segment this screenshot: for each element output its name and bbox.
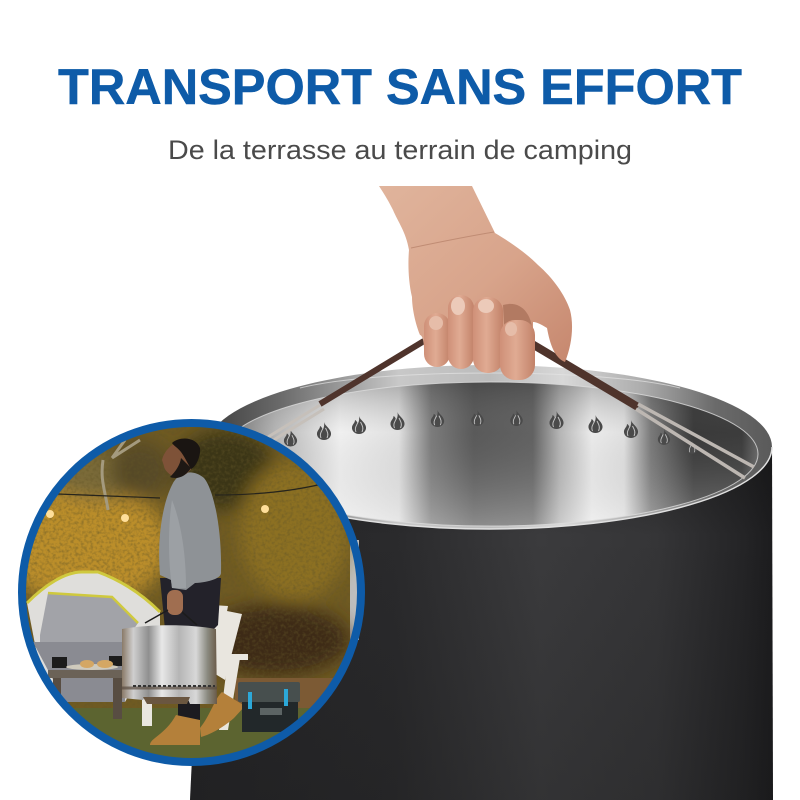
wrist and palm	[379, 186, 572, 362]
fire pit black body	[190, 447, 773, 800]
little finger	[500, 320, 535, 380]
subtitle: De la terrasse au terrain de camping	[168, 135, 632, 165]
product: fire pit	[190, 365, 773, 800]
flame vent row	[284, 410, 697, 454]
leaf litter band	[235, 678, 333, 708]
cooler	[238, 682, 300, 732]
inset photo	[0, 420, 361, 770]
fire pit steel interior	[222, 382, 758, 526]
ground	[74, 708, 310, 758]
mini fire pit	[122, 625, 217, 704]
bare tree	[102, 440, 140, 510]
picnic table	[48, 656, 122, 719]
middle finger	[448, 295, 474, 369]
adirondack chair	[142, 605, 248, 730]
head and beard	[162, 444, 192, 476]
title: TRANSPORT SANS EFFORT	[58, 59, 742, 115]
trousers and rear leg	[160, 578, 221, 629]
inset scene	[26, 427, 356, 758]
fire pit steel rim	[207, 365, 772, 529]
string lights	[46, 484, 318, 522]
inset blue ring	[22, 423, 361, 762]
shadow between palm and thumb	[503, 304, 533, 345]
ring finger	[473, 297, 503, 373]
foliage background	[26, 427, 356, 708]
boots	[200, 692, 245, 737]
hand	[167, 590, 183, 615]
hand	[379, 186, 572, 380]
wrist crease	[411, 232, 494, 248]
index finger	[424, 313, 450, 367]
man	[145, 439, 245, 745]
tent	[27, 572, 160, 702]
handle	[268, 341, 754, 478]
light strip behind inset	[345, 540, 359, 640]
hoodie	[159, 472, 221, 590]
